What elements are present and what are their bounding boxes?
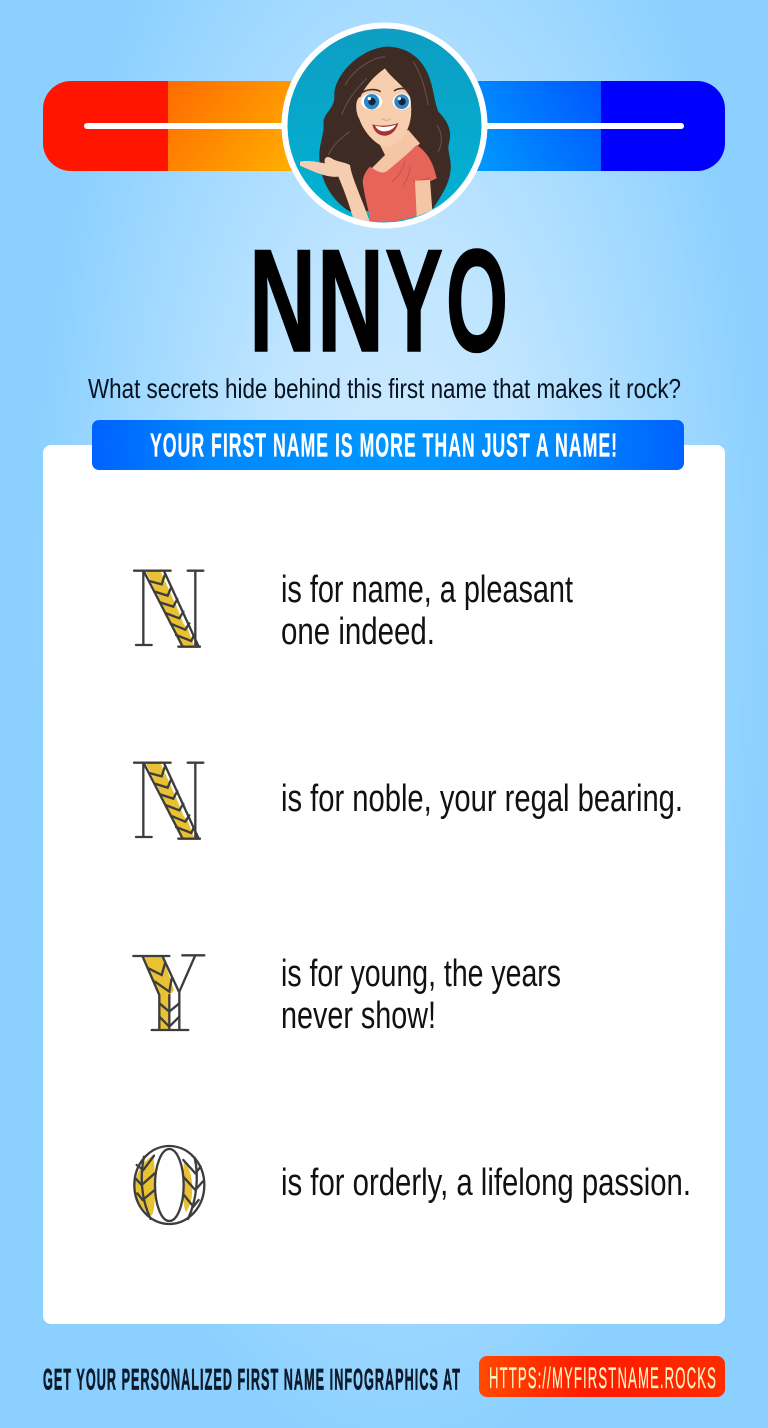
text: N meaning: is for name, a pleasant (281, 569, 573, 611)
icon: letter O (134, 1146, 204, 1224)
title: Y (385, 219, 443, 382)
header gradient bar (43, 81, 725, 171)
eyes (361, 94, 382, 110)
text: Y meaning line two: never show! (281, 995, 436, 1037)
avatar: cartoon woman in circle (284, 26, 484, 226)
icon: letter N (134, 571, 203, 647)
icon: letter N second (134, 763, 203, 839)
title: O (446, 219, 508, 382)
eyebrows (361, 88, 409, 94)
footer url button (479, 1356, 725, 1397)
text: N meaning line two: one indeed. (281, 611, 435, 653)
title: N (317, 219, 384, 382)
hair (319, 47, 451, 212)
title: N (249, 219, 316, 382)
icon: letter Y (133, 955, 204, 1030)
neck and chest (372, 130, 420, 172)
nose and smile (382, 118, 391, 120)
text: Y meaning: is for young, the years (281, 953, 561, 995)
raised arm and hand (300, 157, 370, 222)
banner (92, 420, 684, 470)
far arm (415, 180, 432, 217)
white content panel (43, 445, 725, 1324)
shirt (363, 145, 437, 222)
face (356, 68, 411, 147)
title (249, 219, 508, 382)
